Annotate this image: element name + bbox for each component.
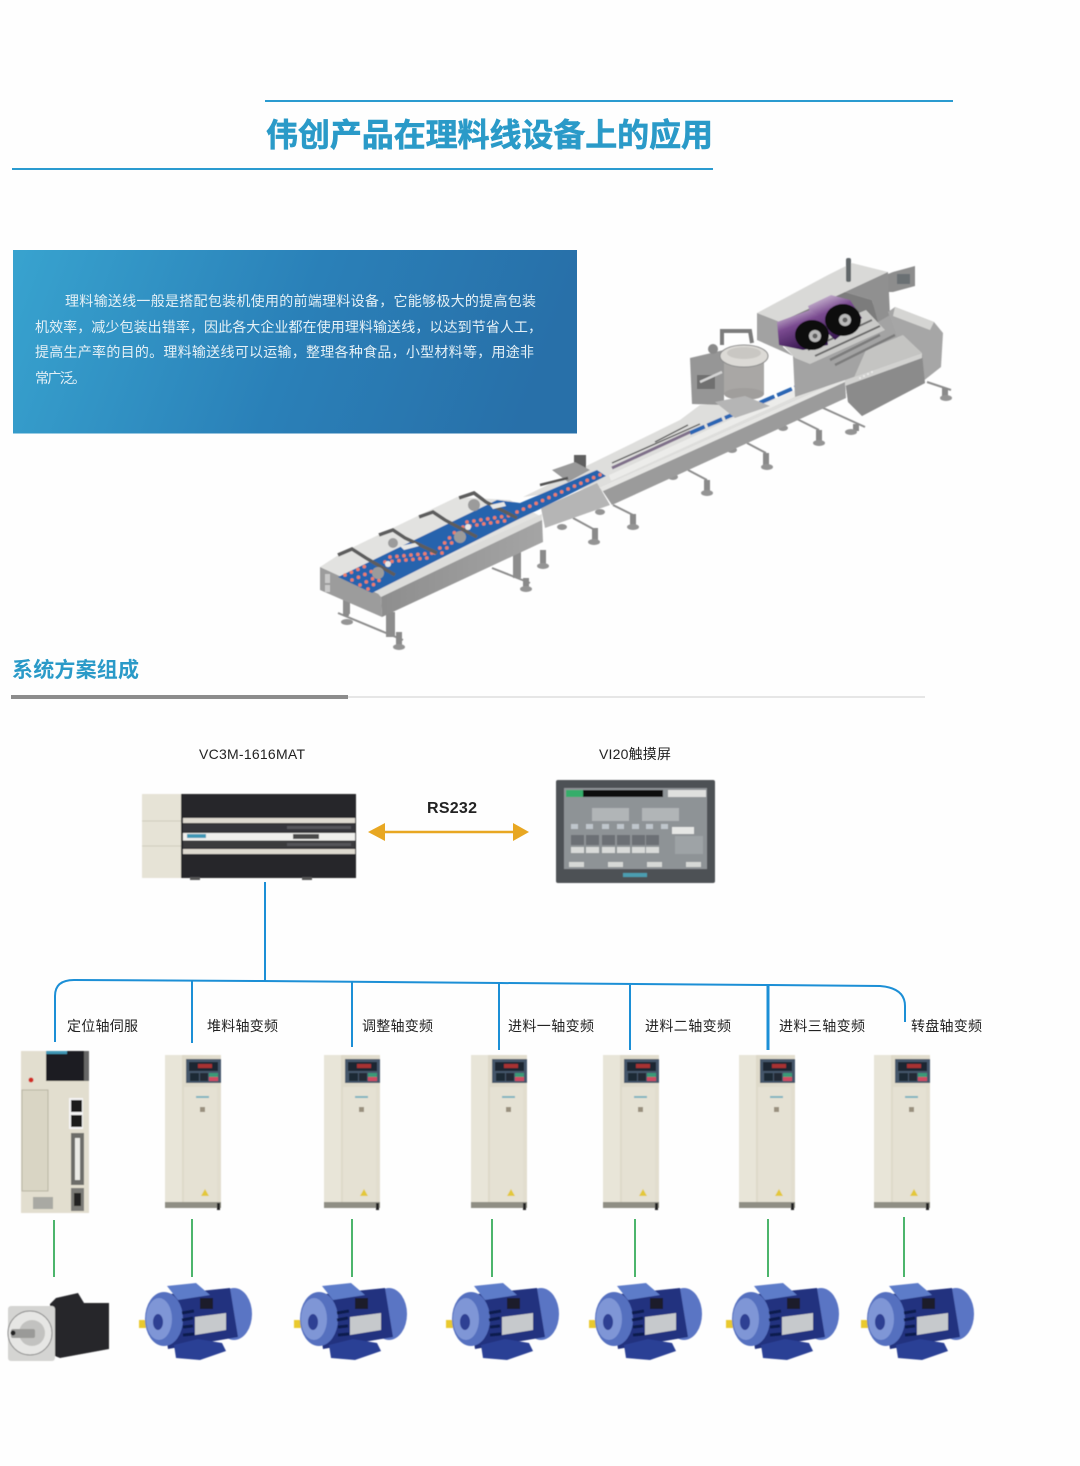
panel: intro text: 常广泛。	[35, 370, 86, 386]
legs and feet	[338, 382, 952, 650]
drive labels: 堆料轴变频	[207, 1018, 278, 1034]
protocol label: RS232	[427, 800, 477, 817]
film rolls	[808, 295, 862, 340]
tray	[783, 310, 885, 364]
drive labels: 定位轴伺服	[67, 1018, 138, 1034]
drive labels: 进料一轴变频	[508, 1018, 594, 1034]
drive labels: 转盘轴变频	[911, 1018, 982, 1034]
PLC label: VC3M-1616MAT	[199, 746, 305, 762]
drive labels: 进料三轴变频	[779, 1018, 865, 1034]
panel: intro text: 提高生产率的目的。理料输送线可以运输，整理各种食品，小型材料等，用途非	[35, 344, 534, 360]
drive labels: 调整轴变频	[362, 1018, 433, 1034]
section heading: 系统方案组成	[12, 658, 139, 682]
panel: intro text: 机效率，减少包装出错率，因此各大企业都在使用理料输送线，以达到节省人工，	[35, 319, 542, 335]
PLC device	[142, 794, 356, 880]
infeed table	[320, 470, 606, 617]
drive to motor connections	[54, 1217, 904, 1277]
HMI touch screen	[556, 780, 715, 883]
HMI label: VI20触摸屏	[599, 746, 671, 762]
feed pot and control box	[690, 331, 770, 418]
servo motor	[8, 1293, 109, 1361]
induction motors	[139, 1283, 974, 1360]
drive labels: 进料二轴变频	[645, 1018, 731, 1034]
long conveyor section	[523, 372, 846, 528]
panel: intro text: 理料输送线一般是搭配包装机使用的前端理料设备，它能够极大的提高包装	[65, 293, 536, 309]
machine body backing	[793, 300, 925, 416]
network bus lines	[55, 882, 905, 1050]
right body	[888, 307, 943, 382]
packaging machine	[757, 258, 943, 416]
hood	[757, 263, 888, 322]
drive labels	[67, 1018, 982, 1034]
section heading	[11, 658, 925, 699]
illustration: material handling line and packaging machine	[320, 258, 952, 650]
arrow: bidirectional RS232 link	[368, 823, 529, 841]
servo drive	[21, 1051, 89, 1213]
title: 伟创产品在理料线设备上的应用	[266, 117, 713, 153]
panel: intro text	[13, 250, 577, 434]
variable frequency drives	[165, 1055, 930, 1210]
